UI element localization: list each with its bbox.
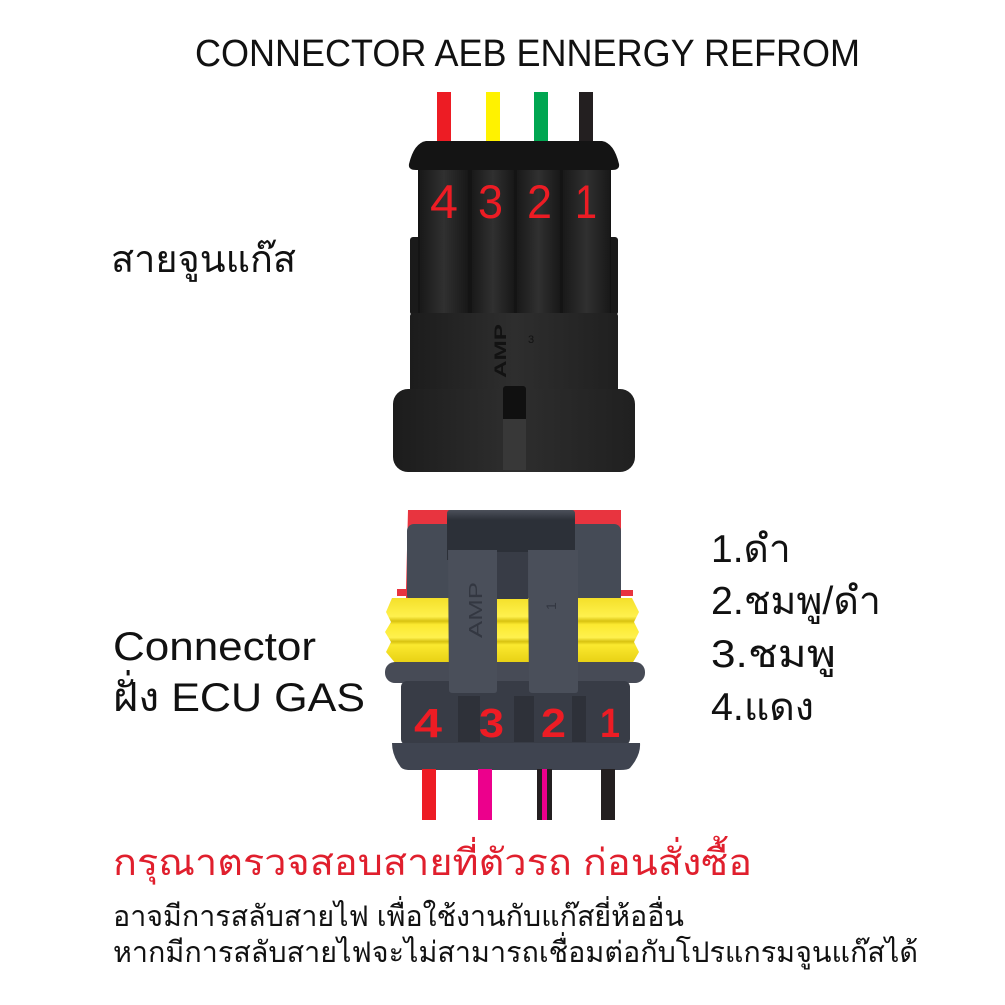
top flange [409, 141, 619, 170]
pin colour list [711, 528, 881, 729]
ribbed body [418, 165, 611, 315]
base collar [393, 389, 635, 472]
yellow gasket [385, 598, 639, 664]
bottom lip [392, 743, 640, 770]
latch digit: 1 [543, 602, 559, 610]
label: gas tuning wire: สายจูนแก๊ส [111, 239, 296, 282]
pin numbers: 1 [600, 700, 620, 746]
connector: ECU gas plug [385, 510, 645, 820]
latch hood [447, 510, 575, 560]
socket recesses [458, 696, 586, 742]
warning note [113, 896, 918, 970]
warning note: หากมีการสลับสายไฟจะไม่สามารถเชื่อมต่อกับโปรแกรมจูนแก๊สได้ [113, 932, 918, 970]
wire colours top [437, 92, 593, 144]
pin numbers: 3 [478, 175, 503, 228]
pin colour list: 4.แดง [711, 686, 814, 729]
red seal [397, 510, 633, 602]
pin numbers: 2 [541, 700, 566, 746]
label: connector ECU side: ฝั่ง ECU GAS [113, 670, 365, 720]
wires bottom [422, 769, 615, 820]
latch arms [448, 550, 578, 693]
label: connector ECU side: Connector [113, 625, 316, 669]
AMP mark: AMP [491, 324, 510, 378]
side tabs [410, 237, 618, 315]
pin numbers: 3 [479, 700, 504, 746]
warning note: อาจมีการสลับสายไฟ เพื่อใช้งานกับแก๊สยี่ห้ออื่น [113, 896, 684, 933]
pin numbers [430, 175, 597, 228]
pin numbers: 4 [414, 700, 442, 746]
pin numbers: 4 [430, 175, 458, 228]
pin colour list: 1.ดำ [711, 528, 791, 571]
pin colour list: 3.ชมพู [711, 633, 836, 677]
latch digit: 3 [528, 334, 534, 346]
mid band [410, 313, 618, 395]
pin numbers: 2 [527, 175, 552, 228]
label: connector ECU side [113, 625, 365, 720]
title: CONNECTOR AEB ENNERGY REFROM [195, 33, 860, 75]
latch [503, 386, 526, 470]
grey body [407, 524, 621, 602]
pin numbers [414, 700, 620, 746]
pin colour list: 2.ชมพู/ดำ [711, 580, 881, 624]
centre slot [496, 552, 528, 599]
lower body [401, 681, 630, 745]
warning heading: กรุณาตรวจสอบสายที่ตัวรถ ก่อนสั่งซื้อ [113, 835, 752, 885]
AMP mark: AMP [466, 582, 486, 638]
flange [385, 662, 645, 683]
connector: AEB black plug [393, 92, 635, 472]
pin numbers: 1 [575, 175, 597, 228]
